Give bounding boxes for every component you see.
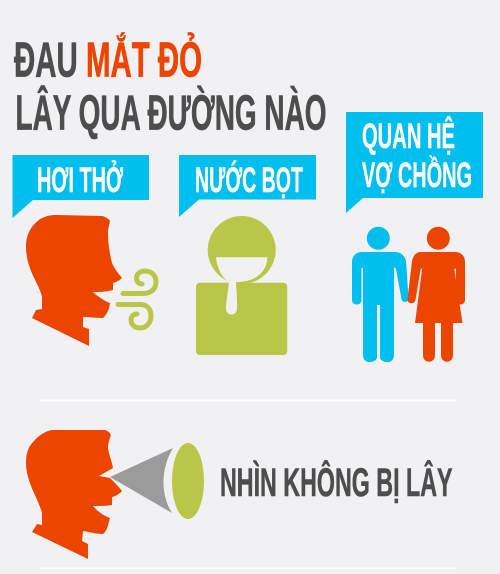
speech bubble: breath xyxy=(12,155,149,218)
title: ĐAU MẮT ĐỎ xyxy=(14,32,202,88)
icon: man xyxy=(352,227,408,362)
icon: gaze cone xyxy=(110,448,173,513)
icon: green eye target xyxy=(172,443,204,519)
icon: person with drooling mouth xyxy=(196,216,287,355)
panel: spouses xyxy=(346,112,483,362)
icon: breath swirls xyxy=(118,271,156,328)
speech bubble: saliva xyxy=(179,155,316,217)
panel: saliva xyxy=(179,155,316,355)
speech bubble: saliva: NƯỚC BỌT xyxy=(195,160,303,200)
speech bubble: breath: HƠI THỞ xyxy=(37,160,123,200)
title xyxy=(14,32,326,140)
speech bubble: spouses xyxy=(346,112,483,213)
icon: head breathing xyxy=(26,215,122,346)
icon: woman xyxy=(407,227,465,362)
panel: breath xyxy=(12,155,156,346)
icon: head looking xyxy=(26,430,122,559)
panel: not spread by looking xyxy=(26,430,453,559)
